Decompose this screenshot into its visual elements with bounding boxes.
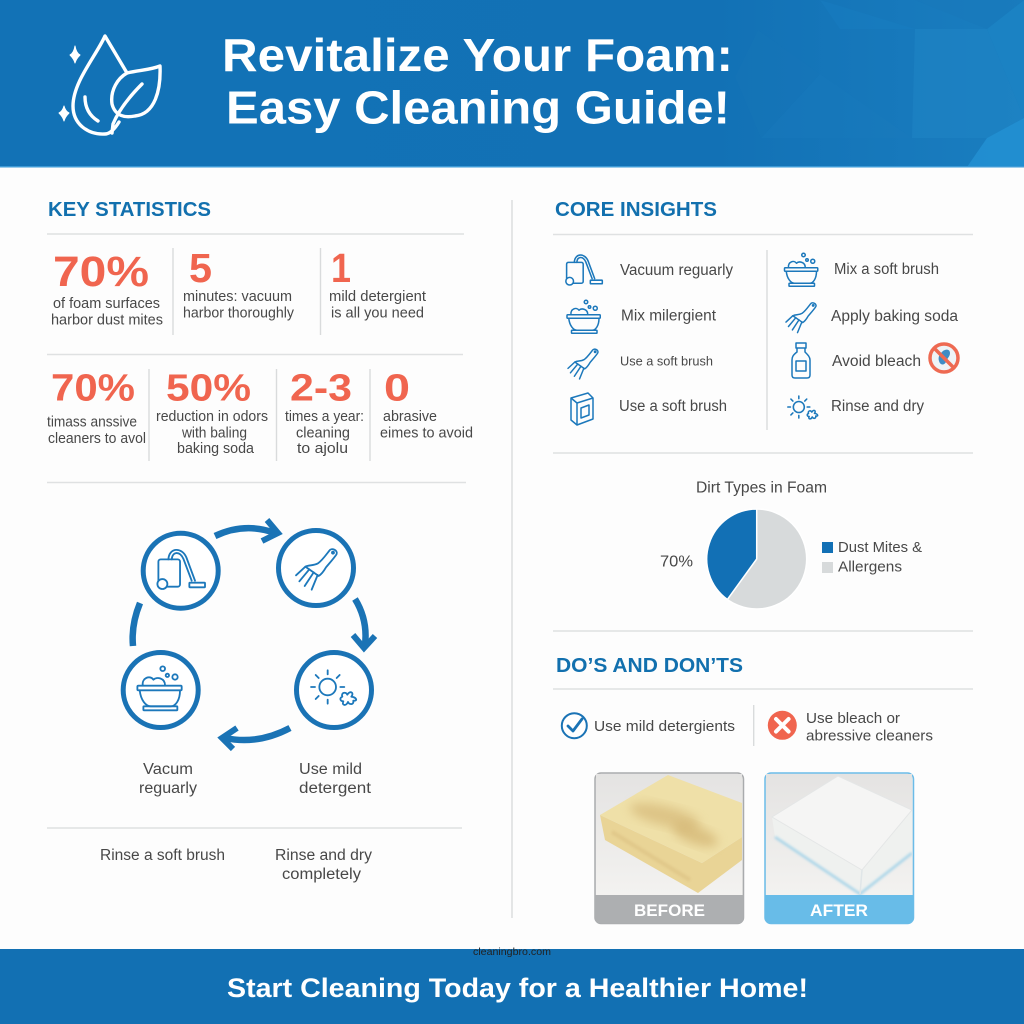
stat: 70% of foam surfaces <box>51 248 163 329</box>
stat: 0 abrasive: 0 <box>384 368 410 410</box>
stat: 70% abrasive cleaners: cleaners to avol <box>48 431 146 447</box>
don't item <box>768 711 933 745</box>
cycle diagram: four cleaning steps <box>123 520 375 749</box>
cycle labels: reguarly <box>139 780 197 797</box>
stat: 50% odor reduction: with baling <box>181 426 247 442</box>
stat: 50% odor reduction <box>156 368 268 457</box>
stat: 1 mild detergent: 1 <box>331 245 351 291</box>
item: use a soft brush with box icon: Use a soft brush <box>619 398 727 415</box>
stat: 70% abrasive cleaners: timass anssive <box>47 415 137 431</box>
item: vacuum regularly <box>566 255 733 285</box>
arrow: bottom <box>222 728 290 749</box>
header banner <box>0 0 1024 168</box>
cycle labels: Vacum <box>143 761 193 778</box>
arrow: top <box>215 520 278 541</box>
legend: Allergens <box>838 560 902 576</box>
do item <box>562 713 735 738</box>
cycle labels: Rinse a soft brush <box>100 847 225 864</box>
stat: 70% abrasive cleaners: 70% <box>51 368 135 410</box>
stat: 70% abrasive cleaners <box>47 368 146 447</box>
divider: centre column <box>511 200 513 918</box>
stat: 2-3 times a year: cleaning <box>296 426 350 442</box>
stat: 5 minutes: 5 <box>189 245 212 291</box>
stat: 50% odor reduction: 50% <box>166 368 251 410</box>
step icon: vacuum <box>143 533 218 608</box>
item: vacuum regularly: Vacuum reguarly <box>620 262 733 279</box>
legend: Dust Mites & <box>838 540 922 556</box>
item: avoid bleach: Avoid bleach <box>832 353 921 370</box>
item: mix a soft brush: Mix a soft brush <box>834 261 939 278</box>
photo card: after <box>765 773 914 924</box>
watermark: cleaningbro.com <box>473 947 551 958</box>
stat: 5 minutes <box>183 245 295 322</box>
stat: 50% odor reduction: baking soda <box>177 441 255 457</box>
stat: 1 mild detergent: mild detergient <box>329 289 426 305</box>
stat: 0 abrasive <box>380 368 473 442</box>
stat: 1 mild detergent <box>329 245 426 322</box>
stat: 2-3 times a year: times a year: <box>285 409 364 425</box>
don't item: Use bleach or <box>806 711 900 727</box>
pie value label: 70% <box>660 554 693 571</box>
footer call to action: Start Cleaning Today for a Healthier Home! <box>227 973 808 1003</box>
title <box>222 29 733 134</box>
title: Easy Cleaning Guide! <box>226 82 730 134</box>
item: mix a soft brush <box>784 253 939 286</box>
icon: water drop with leaf logo <box>59 36 160 134</box>
stat: 50% odor reduction: reduction in odors <box>156 409 268 425</box>
stat: 5 minutes: harbor thoroughly <box>183 306 295 322</box>
label: before: BEFORE <box>634 901 705 920</box>
label: after: AFTER <box>810 901 868 920</box>
item: use a soft brush small: Use a soft brush <box>620 354 713 369</box>
stat: 2-3 times a year: to ajolu <box>297 441 348 457</box>
stat: 70% of foam surfaces: harbor dust mites <box>51 313 163 329</box>
panel: core insights <box>553 199 973 453</box>
stat: 1 mild detergent: is all you need <box>331 306 424 322</box>
stat: 70% of foam surfaces: of foam surfaces <box>53 296 160 312</box>
heading: core insights: CORE INSIGHTS <box>555 199 717 221</box>
cycle labels <box>47 761 462 883</box>
arrow: left connector <box>133 603 140 646</box>
step icon: sun and dry <box>296 652 372 728</box>
stat: 5 minutes: minutes: vacuum <box>183 289 292 305</box>
do item: Use mild detergients <box>594 719 735 735</box>
item: apply baking soda: Apply baking soda <box>831 308 958 325</box>
panel: key statistics <box>47 199 473 482</box>
stat: 70% of foam surfaces: 70% <box>53 248 149 296</box>
pie chart: dirt types in foam <box>660 480 922 609</box>
arrow: right <box>353 599 375 648</box>
legend <box>822 540 922 576</box>
stat: 2-3 times a year <box>285 368 364 457</box>
icon: prohibited sign <box>930 344 958 372</box>
photo card: before <box>595 773 744 924</box>
heading: do's and don'ts: DO’S AND DON’TS <box>556 655 743 677</box>
stat: 0 abrasive: eimes to avoid <box>380 426 473 442</box>
step icon: tub <box>123 652 198 728</box>
cycle labels: Rinse and dry <box>275 847 372 864</box>
item: mix detergent: Mix milergient <box>621 308 717 325</box>
cycle labels: completely <box>282 866 361 883</box>
title: Revitalize Your Foam: <box>222 29 733 81</box>
footer banner <box>0 949 1024 1024</box>
item: use a soft brush small <box>568 349 713 379</box>
item: rinse and dry <box>788 396 924 419</box>
heading: key statistics: KEY STATISTICS <box>48 199 211 221</box>
pie slices <box>707 509 807 609</box>
item: apply baking soda <box>786 303 958 333</box>
cycle labels: detergent <box>299 780 372 797</box>
chart title: Dirt Types in Foam <box>696 480 827 497</box>
step icon: brush <box>278 530 354 606</box>
cycle labels: Use mild <box>299 761 362 778</box>
item: mix detergent <box>567 300 717 333</box>
don't item: abressive cleaners <box>806 729 933 745</box>
panel: do's and don'ts <box>556 655 933 924</box>
item: use a soft brush with box icon <box>571 393 727 425</box>
item: avoid bleach <box>792 343 958 378</box>
stat: 0 abrasive: abrasive <box>383 409 437 425</box>
item: rinse and dry: Rinse and dry <box>831 398 924 415</box>
stat: 2-3 times a year: 2-3 <box>290 368 352 410</box>
